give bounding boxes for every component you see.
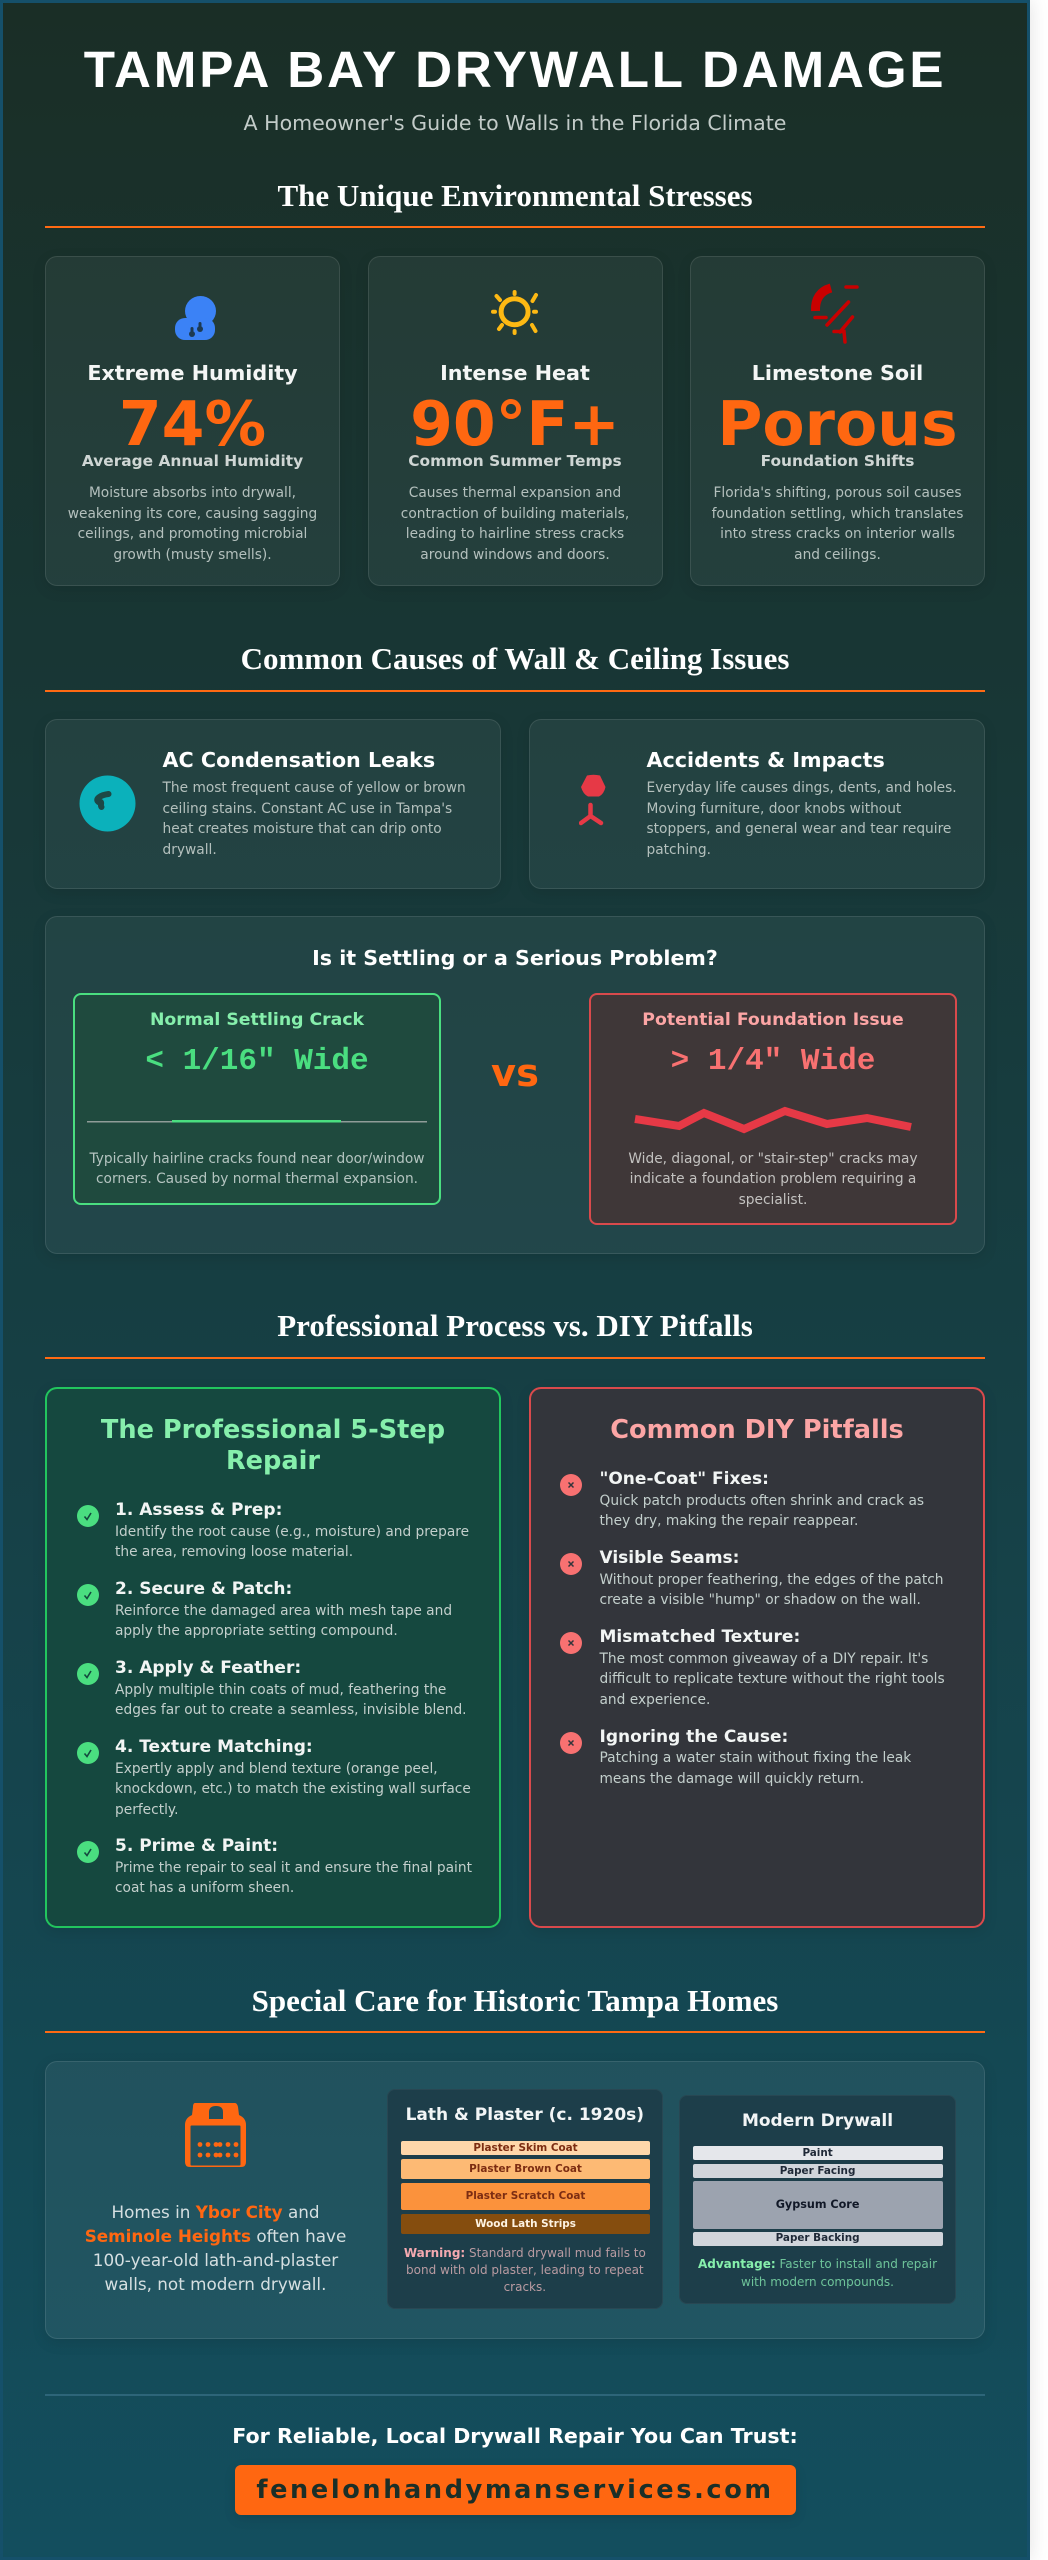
crack diagram: [87, 1120, 427, 1122]
label: Potential Foundation Issue: [642, 1010, 904, 1030]
advantage note: Advantage: Faster to install and repair: [698, 2257, 937, 2271]
layer: Plaster Skim Coat: [473, 2142, 578, 2154]
step text: Reinforce the damaged area with mesh tape and: [115, 1603, 452, 1619]
panel: DIY pitfalls: [529, 1387, 985, 1928]
heading: historic homes: Special Care for Historic Tampa Homes: [252, 1983, 778, 2018]
step text: [115, 1860, 472, 1896]
description: specialist.: [739, 1192, 807, 1208]
step title: 2. Secure & Patch:: [115, 1579, 292, 1599]
stat: 90°F+: [410, 388, 620, 460]
icon: AC leak: [80, 776, 136, 832]
panel: extreme humidity: [45, 256, 340, 586]
pitfall text: Without proper feathering, the edges of the patch: [600, 1572, 944, 1588]
icon: x: [560, 1553, 582, 1575]
layer: [401, 2214, 650, 2234]
website button: fenelonhandymanservices.com: [256, 2474, 774, 2504]
warning note: [387, 2244, 663, 2296]
step text: coat has a uniform sheen.: [115, 1880, 294, 1896]
step 2: [77, 1579, 452, 1639]
step text: perfectly.: [115, 1802, 178, 1818]
vs label: vs: [491, 1050, 539, 1096]
warning note: cracks.: [504, 2280, 546, 2294]
pitfall text: The most common giveaway of a DIY repair. It's: [600, 1651, 928, 1667]
description: corners. Caused by normal thermal expansion.: [96, 1171, 418, 1187]
step text: [115, 1761, 471, 1818]
heading: environmental stresses: The Unique Environmental Stresses: [277, 178, 753, 213]
pitfall title: "One-Coat" Fixes:: [600, 1469, 769, 1489]
layer: Paint: [802, 2147, 833, 2159]
layered wall diagram: [401, 2141, 650, 2234]
icon: historic building: [185, 2103, 246, 2167]
stat label: Foundation Shifts: [761, 452, 914, 470]
layer: Wood Lath Strips: [475, 2218, 576, 2230]
pitfall 2: [560, 1548, 944, 1608]
cause text: patching.: [646, 842, 711, 858]
step text: Identify the root cause (e.g., moisture) and prepare: [115, 1524, 469, 1540]
box: lath and plaster: [387, 2089, 663, 2309]
box: modern drywall: [679, 2095, 956, 2304]
description: weakening its core, causing sagging: [68, 506, 317, 522]
footer call to action text: For Reliable, Local Drywall Repair You Can Trust:: [232, 2424, 798, 2448]
cause title: AC Condensation Leaks: [162, 748, 435, 772]
icon: check: [77, 1841, 99, 1863]
box: normal settling crack: [73, 993, 441, 1205]
heading: professional process: Professional Process vs. DIY Pitfalls: [277, 1308, 753, 1343]
historic homes text: walls, not modern drywall.: [105, 2274, 326, 2294]
step 1: [77, 1500, 469, 1560]
pitfall text: [600, 1493, 924, 1529]
icon: cracked ground: [811, 284, 859, 344]
cause text: The most frequent cause of yellow or brown: [162, 780, 466, 796]
layer: [693, 2146, 943, 2160]
crack diagram: [634, 1106, 912, 1134]
stat: 74%: [119, 388, 266, 460]
cause text: drywall.: [162, 842, 217, 858]
cause text: ceiling stains. Constant AC use in Tampa's: [162, 801, 452, 817]
description: growth (musty smells).: [113, 547, 272, 563]
icon: x: [560, 1474, 582, 1496]
step text: knockdown, etc.) to match the existing wall surface: [115, 1781, 471, 1797]
layer: [401, 2141, 650, 2155]
card title: Intense Heat: [440, 360, 590, 384]
pitfall text: means the damage will quickly return.: [600, 1771, 864, 1787]
description: into stress cracks on interior walls: [720, 526, 955, 542]
panel: professional repair: [45, 1387, 501, 1928]
description: indicate a foundation problem requiring a: [630, 1171, 916, 1187]
cause text: stoppers, and general wear and tear require: [646, 821, 951, 837]
pitfall title: Mismatched Texture:: [600, 1627, 800, 1647]
box title: Modern Drywall: [742, 2111, 893, 2131]
cause text: Everyday life causes dings, dents, and holes.: [646, 780, 957, 796]
description: Typically hairline cracks found near door/window: [90, 1150, 424, 1166]
pitfall text: Quick patch products often shrink and crack as: [600, 1493, 924, 1509]
step text: [115, 1524, 469, 1560]
pitfall 3: [560, 1627, 945, 1708]
pitfall 4: [560, 1726, 912, 1787]
panel: settling vs serious comparison: [45, 916, 985, 1254]
panel: AC condensation leaks: [45, 719, 501, 889]
layer: Gypsum Core: [776, 2198, 859, 2211]
cause text: [162, 780, 466, 858]
step text: Expertly apply and blend texture (orange peel,: [115, 1761, 438, 1777]
pitfall text: they dry, making the repair reappear.: [600, 1513, 858, 1529]
description: around windows and doors.: [420, 547, 610, 563]
step text: apply the appropriate setting compound.: [115, 1623, 398, 1639]
icon: check: [77, 1505, 99, 1527]
panel: accidents and impacts: [529, 719, 985, 889]
box title: Lath & Plaster (c. 1920s): [406, 2105, 644, 2125]
step text: Apply multiple thin coats of mud, feathering the: [115, 1682, 446, 1698]
warning note: Warning: Standard drywall mud fails to: [404, 2246, 646, 2260]
description: [628, 1150, 918, 1208]
pitfall text: [600, 1572, 944, 1608]
comparison title: Is it Settling or a Serious Problem?: [312, 946, 718, 970]
icon: check: [77, 1584, 99, 1606]
card title: Extreme Humidity: [87, 360, 298, 384]
layer: Plaster Scratch Coat: [466, 2190, 585, 2202]
measurement: > 1/4" Wide: [671, 1044, 875, 1078]
warning note: bond with old plaster, leading to repeat: [406, 2262, 644, 2276]
cause text: heat creates moisture that can drip onto: [162, 821, 442, 837]
stat label: Common Summer Temps: [408, 452, 622, 470]
historic homes text: [45, 2200, 386, 2296]
pitfall text: difficult to replicate texture without the right tools: [600, 1671, 945, 1687]
layer: Plaster Brown Coat: [469, 2163, 582, 2175]
icon: humidity cloud: [175, 296, 216, 340]
icon: check: [77, 1663, 99, 1685]
layer: [693, 2232, 943, 2246]
pitfall 1: [560, 1469, 924, 1529]
pitfall text: Patching a water stain without fixing the leak: [600, 1750, 911, 1766]
box: potential foundation issue: [589, 993, 957, 1225]
description: and ceilings.: [794, 547, 881, 563]
description: ceilings, and promoting microbial: [78, 526, 307, 542]
step title: 4. Texture Matching:: [115, 1737, 313, 1757]
title: TAMPA BAY DRYWALL DAMAGE: [84, 41, 946, 98]
stat label: Average Annual Humidity: [82, 452, 303, 470]
description: foundation settling, which translates: [712, 506, 963, 522]
layer: [401, 2159, 650, 2179]
pitfall title: Ignoring the Cause:: [600, 1726, 788, 1746]
historic homes text: Homes in Ybor City and: [111, 2202, 320, 2222]
layer: [693, 2181, 943, 2229]
description: Moisture absorbs into drywall,: [89, 485, 296, 501]
step 5: [77, 1836, 472, 1896]
description: Florida's shifting, porous soil causes: [713, 485, 962, 501]
subtitle: A Homeowner's Guide to Walls in the Florida Climate: [244, 111, 786, 135]
description: Causes thermal expansion and: [409, 485, 621, 501]
layer: [401, 2183, 650, 2210]
description: Wide, diagonal, or "stair-step" cracks may: [628, 1150, 918, 1166]
pitfall text: [600, 1748, 911, 1789]
step title: 3. Apply & Feather:: [115, 1658, 301, 1678]
panel: limestone soil: [690, 256, 985, 586]
heading: common causes: Common Causes of Wall & Ceiling Issues: [241, 641, 789, 676]
historic homes text: Seminole Heights often have: [85, 2226, 346, 2246]
icon: sun: [491, 290, 538, 335]
step text: the area, removing loose material.: [115, 1544, 353, 1560]
layer: Paper Backing: [776, 2232, 860, 2244]
step text: edges far out to create a seamless, invisible blend.: [115, 1702, 467, 1718]
step text: Prime the repair to seal it and ensure the final paint: [115, 1860, 472, 1876]
website button: [234, 2464, 796, 2515]
description: [401, 485, 629, 563]
icon: impact: [579, 774, 606, 826]
step text: [115, 1603, 452, 1639]
pitfall title: Visible Seams:: [600, 1548, 739, 1568]
layer: Paper Facing: [780, 2165, 855, 2177]
icon: x: [560, 1732, 582, 1754]
advantage note: with modern compounds.: [741, 2275, 894, 2289]
step title: 1. Assess & Prep:: [115, 1500, 282, 1520]
step title: 5. Prime & Paint:: [115, 1836, 278, 1856]
label: Normal Settling Crack: [150, 1010, 364, 1030]
panel: historic homes: [45, 2061, 985, 2339]
measurement: < 1/16" Wide: [145, 1044, 369, 1078]
cause text: [646, 780, 957, 858]
description: contraction of building materials,: [401, 506, 629, 522]
icon: x: [560, 1632, 582, 1654]
step 3: [77, 1658, 467, 1718]
description: [89, 1150, 424, 1187]
panel heading: The Professional 5-Step: [101, 1415, 445, 1445]
cause text: Moving furniture, door knobs without: [646, 801, 901, 817]
panel: intense heat: [368, 256, 662, 586]
step text: [115, 1682, 467, 1718]
layer: [693, 2164, 943, 2178]
historic homes text: 100-year-old lath-and-plaster: [93, 2250, 338, 2270]
card title: Limestone Soil: [752, 360, 923, 384]
panel heading: [101, 1415, 445, 1476]
panel heading: Common DIY Pitfalls: [610, 1415, 904, 1445]
advantage note: [679, 2256, 956, 2291]
description: leading to hairline stress cracks: [406, 526, 624, 542]
pitfall text: create a visible "hump" or shadow on the wall.: [600, 1592, 921, 1608]
cause title: Accidents & Impacts: [646, 748, 885, 772]
icon: check: [77, 1742, 99, 1764]
layered wall diagram: [693, 2146, 943, 2246]
step 4: [77, 1737, 471, 1818]
panel heading: Repair: [226, 1446, 320, 1476]
pitfall text: [599, 1651, 945, 1708]
description: [712, 485, 963, 563]
stat: Porous: [717, 388, 958, 460]
pitfall text: and experience.: [600, 1692, 710, 1708]
description: [68, 485, 317, 563]
